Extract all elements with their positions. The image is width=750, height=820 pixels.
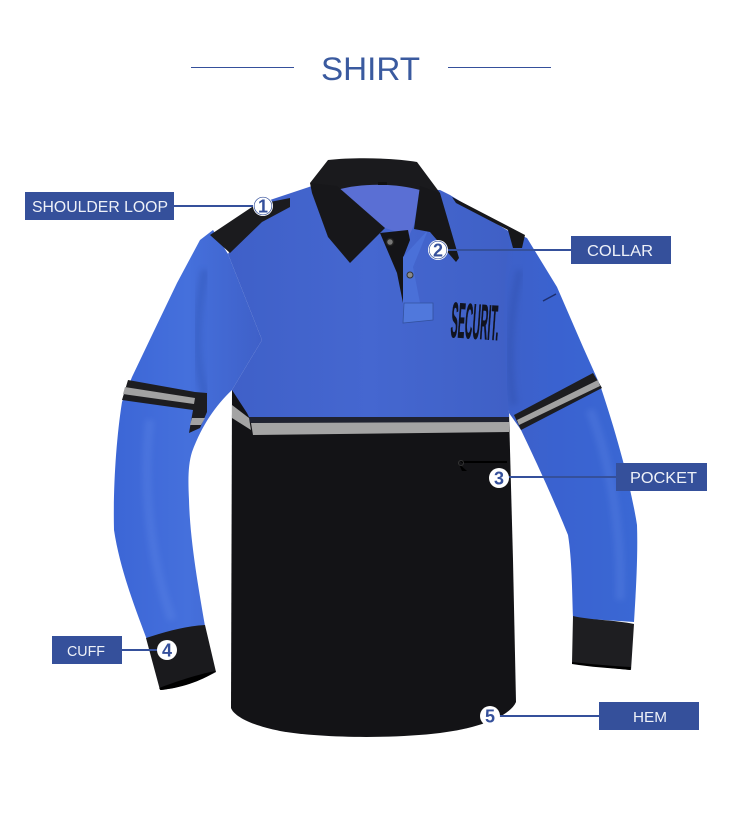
collar [310, 158, 459, 263]
callout: hem [480, 702, 699, 730]
callout: hem: HEM [633, 709, 667, 726]
left sleeve reflective tape [122, 380, 207, 433]
body reflective tape [232, 405, 509, 435]
callout: cuff [52, 636, 177, 664]
callout: shoulder loop: 1 [258, 196, 268, 216]
callout: hem: 5 [485, 706, 495, 726]
right cuff [572, 616, 634, 670]
callout: cuff: 4 [162, 640, 172, 660]
right sleeve [490, 230, 637, 670]
callout: collar: 2 [433, 240, 443, 260]
collar label [378, 182, 387, 185]
callout: collar [428, 236, 671, 264]
upper body blue [228, 186, 510, 419]
callout: shoulder loop [25, 192, 273, 220]
left cuff [146, 625, 216, 690]
sleeve pocket slit [543, 294, 556, 301]
callout: pocket: POCKET [630, 470, 697, 487]
shirt illustration [114, 158, 637, 737]
placket [380, 230, 433, 323]
pocket zipper [458, 460, 507, 471]
callout: pocket: 3 [494, 468, 504, 488]
shirt illustration: SECURIT. [449, 292, 501, 351]
callout: cuff: CUFF [67, 643, 105, 660]
lower body black [231, 390, 516, 737]
callout: collar: COLLAR [587, 243, 653, 260]
inner neck [337, 183, 420, 236]
title: SHIRT [321, 51, 420, 87]
left shoulder panel [210, 198, 290, 253]
callout: shoulder loop: SHOULDER LOOP [32, 199, 168, 216]
left sleeve [114, 230, 262, 690]
right shoulder panel [452, 197, 525, 248]
callout: pocket [489, 463, 707, 491]
right sleeve reflective tape [514, 373, 602, 430]
